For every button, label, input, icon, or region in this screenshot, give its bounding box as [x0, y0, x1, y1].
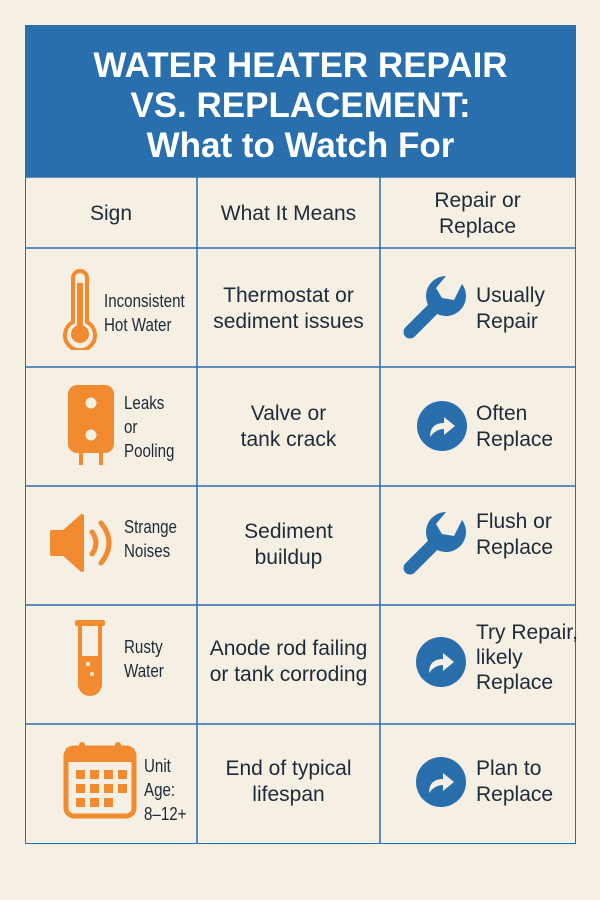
text: rusty water: [124, 637, 164, 681]
text: try repair: [476, 621, 578, 694]
icon: thermometer: [62, 269, 98, 350]
header row: Repair or: [434, 189, 521, 212]
text: lifespan: [252, 783, 325, 806]
text: unit age: 8–12+: [144, 804, 186, 824]
text: leaks: Pooling: [124, 441, 174, 461]
text: plan to replace: [476, 757, 553, 806]
header row: What It Means: [221, 202, 356, 225]
icon: speaker: [50, 514, 112, 572]
text: flush or replace: Flush or: [476, 510, 552, 533]
text: End of typical: [225, 757, 352, 780]
title banner: WATER HEATER REPAIR: [93, 46, 508, 85]
text: often replace: [476, 402, 553, 451]
text: rusty water: Water: [124, 661, 164, 681]
text: often replace: Often: [476, 402, 527, 425]
title banner: VS. REPLACEMENT:: [130, 86, 471, 125]
text: usually repair: Usually: [476, 284, 545, 307]
text: unit age: Unit: [144, 756, 171, 776]
text: inconsistent hot water: Hot Water: [104, 315, 172, 335]
text: buildup: [255, 546, 322, 569]
text: flush or replace: Replace: [476, 536, 553, 559]
text: try repair: likely: [476, 646, 523, 669]
text: inconsistent hot water: [104, 291, 185, 335]
text: plan to replace: Plan to: [476, 757, 541, 780]
icon: test tube: [75, 620, 105, 696]
icon: wrench 1: [404, 276, 466, 338]
text: strange noises: Strange: [124, 517, 177, 537]
title banner: [25, 25, 576, 177]
text: Valve or: [251, 402, 326, 425]
icon: arrow circle 2: [416, 637, 466, 687]
text: leaks: [124, 393, 174, 461]
text: often replace: Replace: [476, 428, 553, 451]
text: flush or replace: [476, 510, 553, 559]
icon: water heater: [68, 385, 114, 465]
text: try repair: Try Repair,: [476, 621, 578, 644]
text: or tank corroding: [210, 663, 367, 686]
icon: arrow circle 3: [416, 757, 466, 807]
meaning texts: sediment issues: [213, 310, 364, 333]
header row: Replace: [439, 215, 516, 238]
icon: arrow circle 1: [417, 401, 467, 451]
header row: Sign: [90, 202, 132, 225]
text: Sediment: [244, 520, 333, 543]
title banner: What to Watch For: [147, 126, 454, 165]
text: unit age: Age:: [144, 780, 175, 800]
text: unit age: [144, 756, 186, 824]
text: usually repair: Repair: [476, 310, 538, 333]
meaning texts: Thermostat or: [223, 284, 354, 307]
text: Anode rod failing: [210, 637, 367, 660]
header row: [90, 189, 521, 238]
text: inconsistent hot water: Inconsistent: [104, 291, 185, 311]
text: usually repair: [476, 284, 545, 333]
icon: calendar: [64, 742, 136, 818]
meaning texts: [213, 284, 364, 333]
text: rusty water: Rusty: [124, 637, 163, 657]
text: strange noises: [124, 517, 177, 561]
icon: wrench 2: [404, 512, 466, 574]
text: leaks: or: [124, 417, 137, 437]
text: tank crack: [241, 428, 336, 451]
text: leaks: Leaks: [124, 393, 164, 413]
text: strange noises: Noises: [124, 541, 170, 561]
text: plan to replace: Replace: [476, 783, 553, 806]
text: try repair: Replace: [476, 671, 553, 694]
